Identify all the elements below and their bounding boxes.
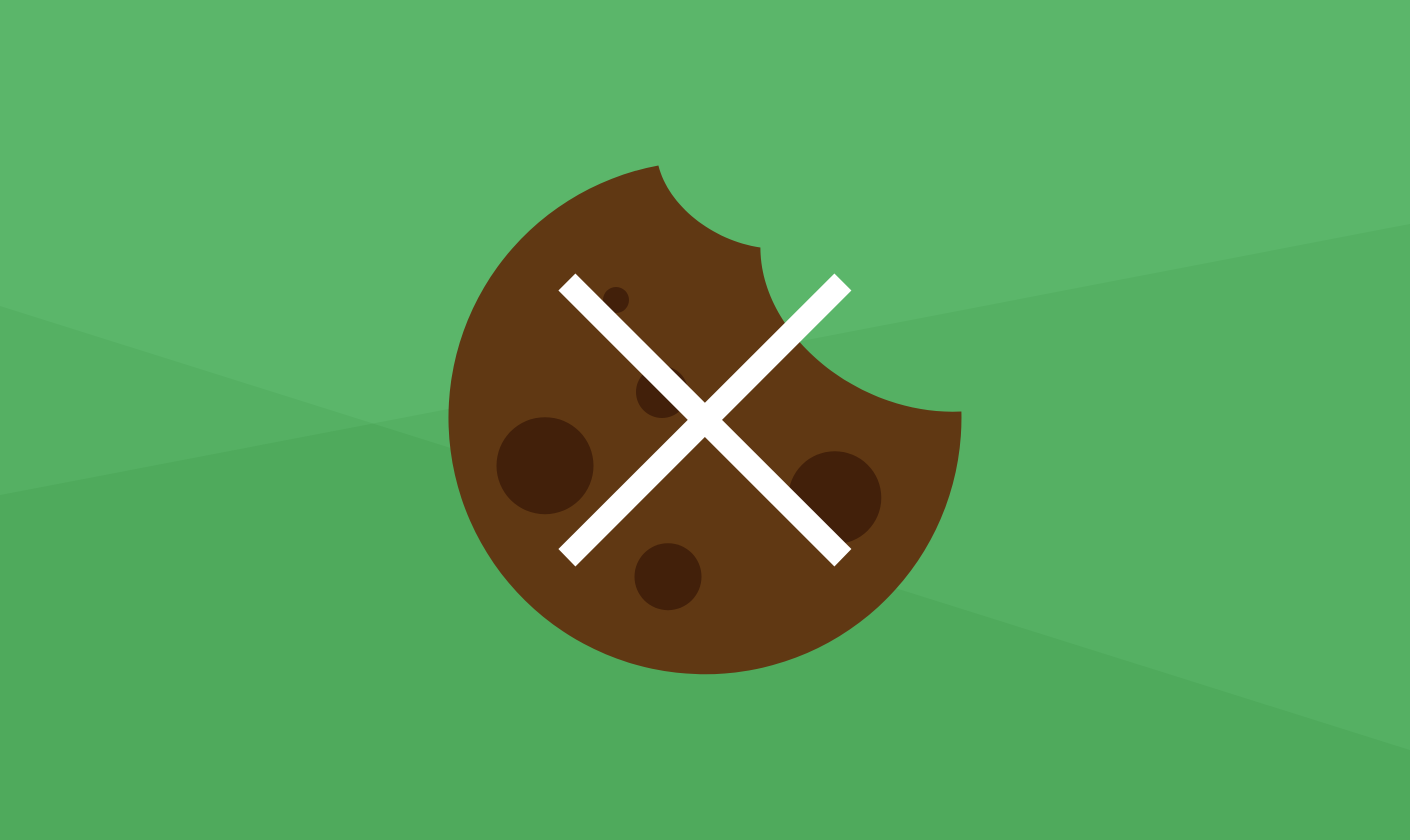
cookie body with two bites [448,166,961,674]
icon: cookie [448,166,961,674]
chocolate chip: centre [636,366,688,418]
background: right middle green facet [373,224,1410,750]
icon: white cross [558,274,851,566]
chocolate chip: left [496,417,594,514]
chocolate chip: right [788,451,881,544]
chocolate chip: bottom [634,543,702,610]
background: darkest green facet [0,424,1410,840]
background: middle green facets [0,306,373,495]
chocolate chip: small top [603,287,629,313]
